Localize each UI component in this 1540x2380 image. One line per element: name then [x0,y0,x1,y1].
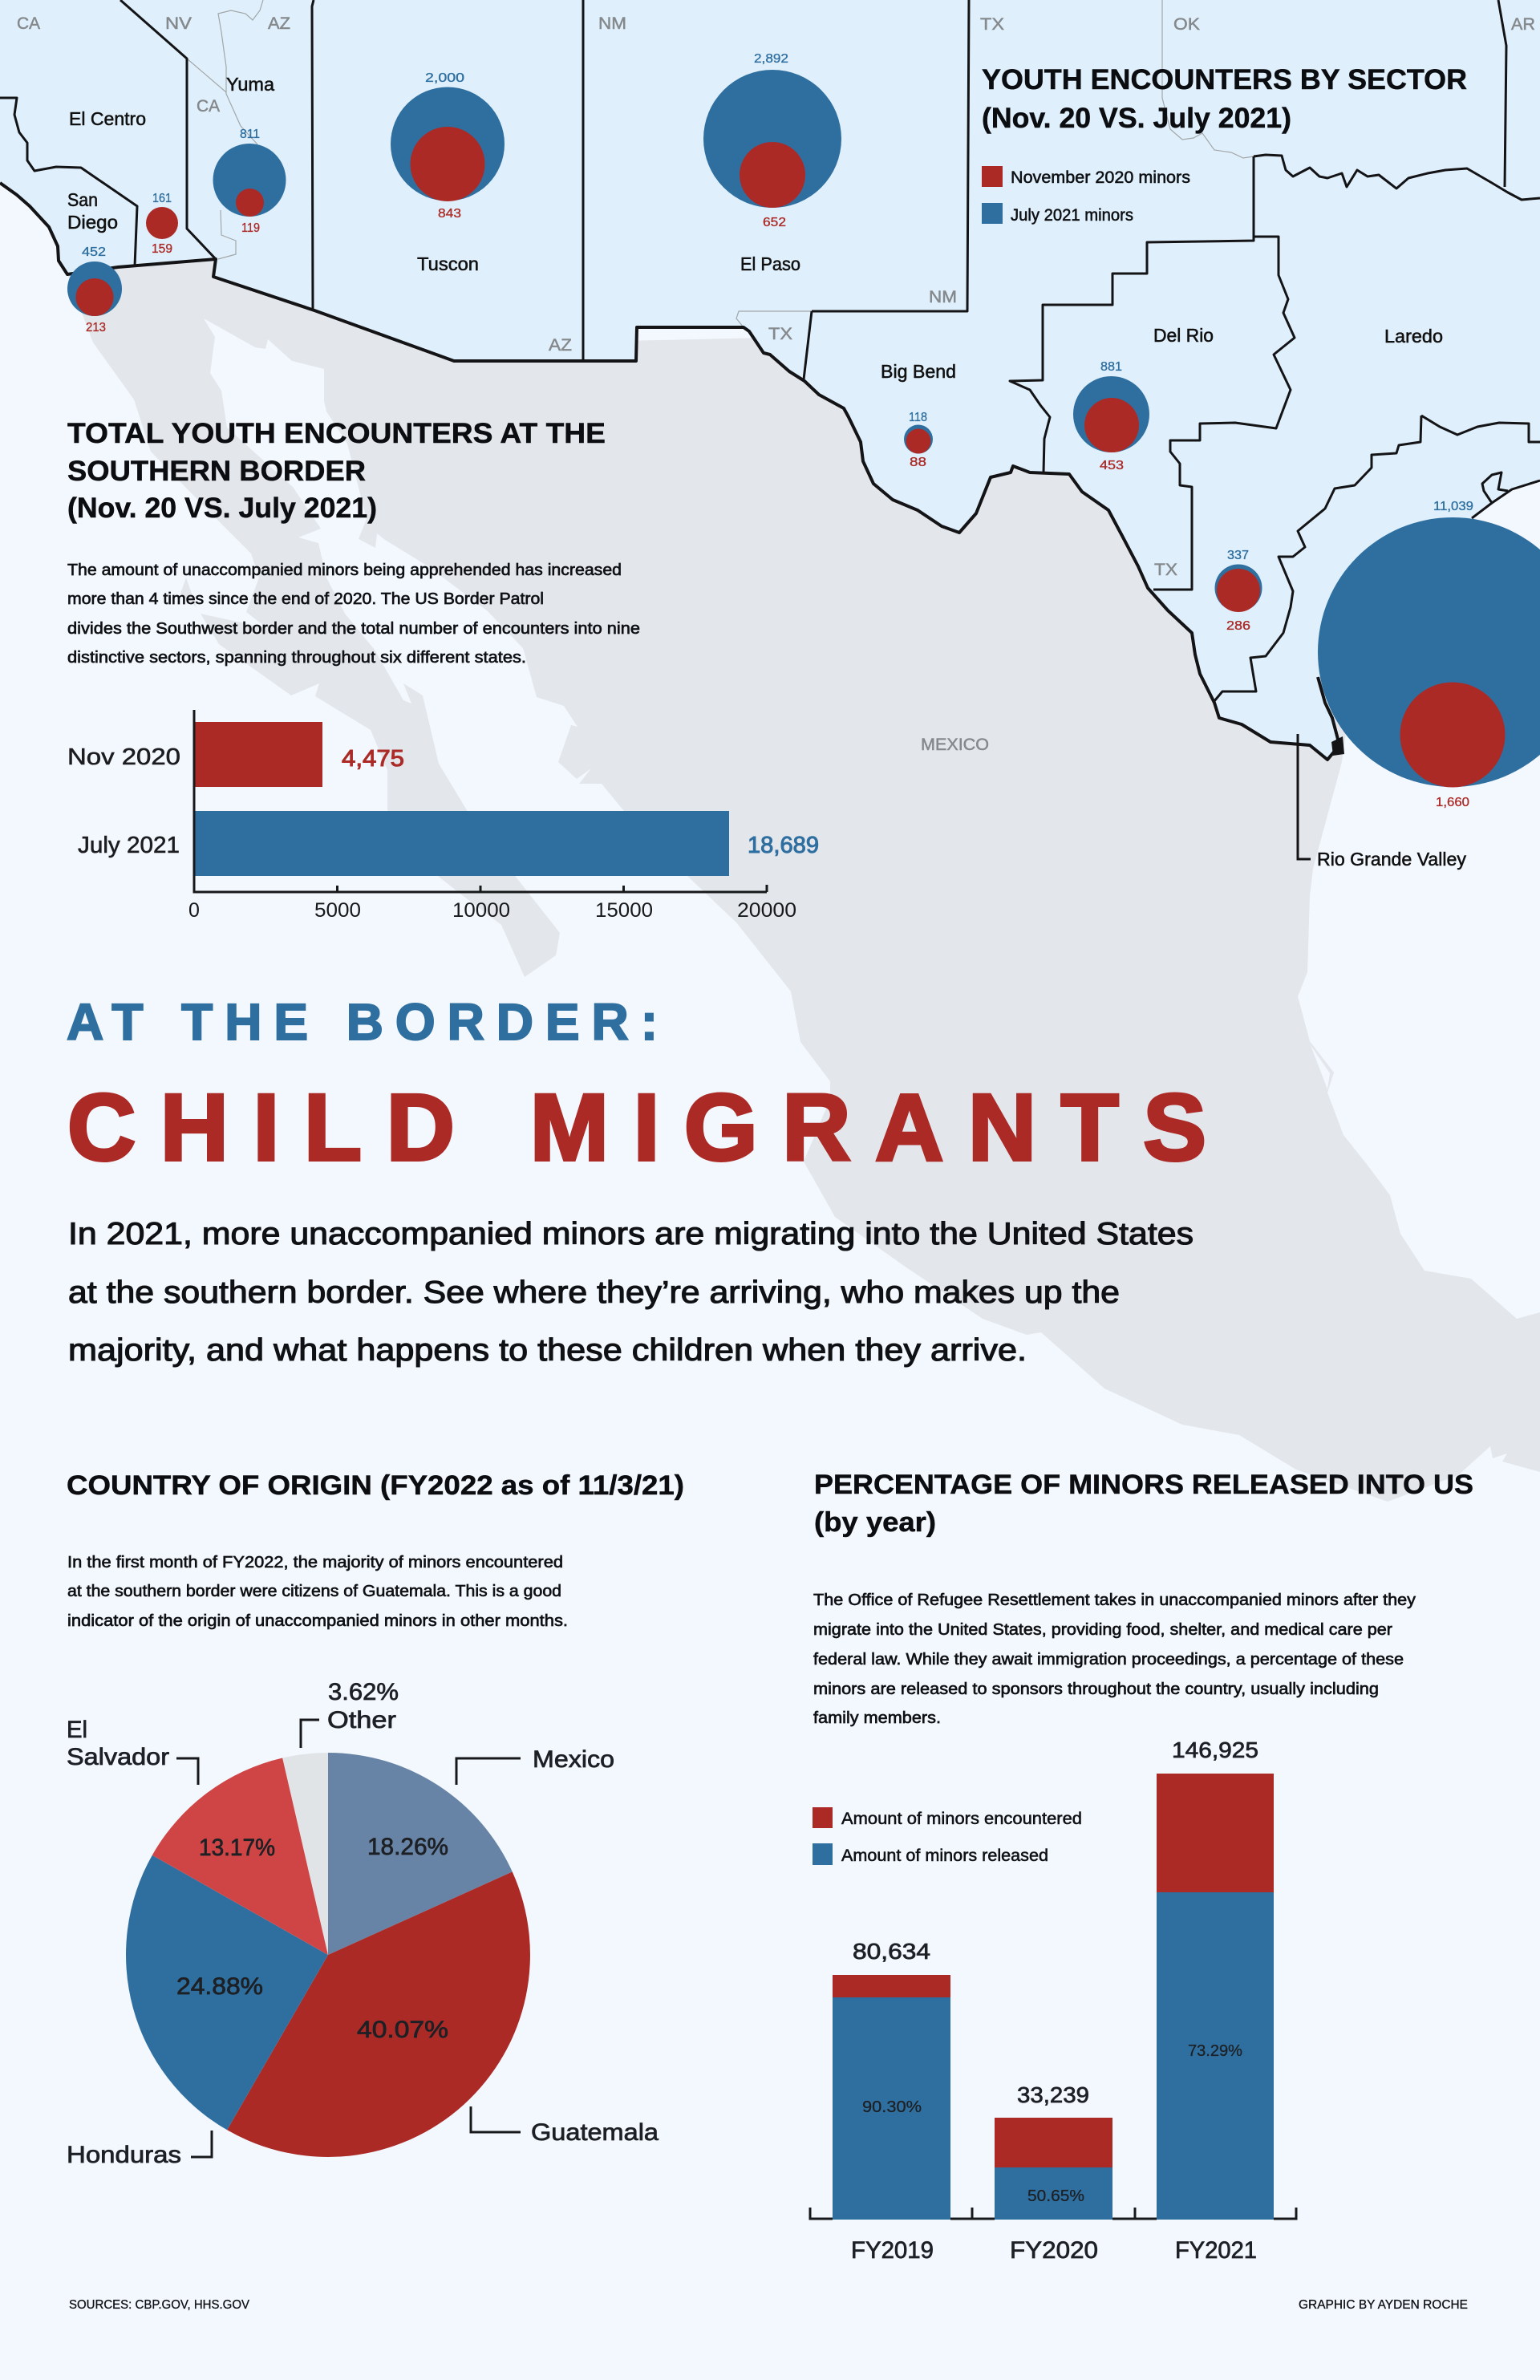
percentage labels: 18.26% [367,1834,448,1860]
sector name labels: San [67,189,98,210]
country labels: Other [327,1707,396,1733]
text block: total encounters description [67,562,640,667]
bubble: Del Rio: 453 [1100,459,1124,472]
bar: FY2019 [833,1939,950,2264]
bubble: Del Rio [1073,360,1149,472]
text block: refugee resettlement description: migrate into the United States, providing food, shelter, and medical care per [813,1621,1392,1639]
bubble: Tuscon [391,71,505,221]
bubble: Laredo: 286 [1226,619,1250,633]
state labels: TX [1154,561,1177,579]
country labels: Salvador [67,1744,169,1770]
text block: total encounters description: more than 4 times since the end of 2020. The US Border Patrol [67,590,544,608]
bar: FY2019: 90.30% [862,2098,922,2116]
sector name labels: Del Rio [1153,325,1214,346]
state labels: CA [197,97,220,116]
title: child migrants: CHILD MIGRANTS [67,1075,1206,1181]
sector name labels: Big Bend [881,361,956,382]
bar: FY2021: 146,925 [1172,1737,1258,1762]
country labels [67,1679,659,2168]
heading: country of origin: COUNTRY OF ORIGIN (FY2022 as of 11/3/21) [67,1470,684,1501]
sector name labels: Diego [67,212,118,233]
bar chart: total encounters: 5000 [314,899,361,922]
state labels: TX [768,325,792,343]
state lines [187,0,1254,327]
bubble: El Paso: 652 [763,216,786,229]
state labels: CA [17,14,40,33]
bar chart: total encounters: 20000 [737,899,796,922]
callout: Rio Grande Valley label [1298,734,1466,870]
callout: Rio Grande Valley label: Rio Grande Valley [1317,849,1466,870]
sector name labels: Yuma [226,74,274,95]
bubble: El Centro: 159 [152,242,172,256]
map of US border sectors [0,0,1540,870]
state labels: AR [1511,15,1535,34]
heading: percentage of minors released: PERCENTAGE OF MINORS RELEASED INTO US [814,1470,1473,1500]
intro paragraph: In 2021, more unaccompanied minors are migrating into the United States [68,1217,1194,1251]
percentage labels: 40.07% [357,2017,448,2043]
bubble: Laredo: 337 [1227,549,1249,562]
state labels: NM [598,14,626,33]
intro paragraph: majority, and what happens to these children when they arrive. [68,1333,1027,1368]
percentage labels [176,1834,448,2043]
state labels: AZ [268,14,290,33]
legend: sector map: November 2020 minors [1011,168,1190,187]
country labels: Guatemala [531,2119,659,2146]
bar: FY2020 [995,2082,1112,2264]
bubble: Yuma: 119 [241,221,260,235]
heading: total youth encounters: SOUTHERN BORDER [67,456,366,487]
bubble: El Centro [146,192,178,256]
heading: youth encounters by sector: YOUTH ENCOUNTERS BY SECTOR [982,64,1467,95]
bubble: El Paso: 2,892 [754,52,788,66]
sector name labels: El Paso [740,253,800,274]
bar: FY2021 [1157,1737,1274,2264]
international border and coastline [0,183,1339,760]
bubble: Yuma [213,128,286,235]
stacked bar chart: minors released [810,1737,1296,2264]
text block: total encounters description: The amount of unaccompanied minors being apprehended has increased [67,562,622,579]
heading: youth encounters by sector [982,64,1467,134]
heading: total youth encounters [67,418,606,524]
state labels: OK [1173,15,1200,34]
bubble: Tuscon: 2,000 [425,71,464,85]
bar chart: total encounters: 18,689 [748,833,819,858]
bubble: Big Bend: 88 [910,456,926,469]
bubble: San Diego [67,245,122,334]
bar chart: total encounters: Nov 2020 [67,744,180,770]
bubble: San Diego: 213 [86,321,106,334]
percentage labels: 13.17% [199,1835,275,1861]
wedge: Other [282,1753,328,1955]
heading: percentage of minors released [814,1470,1473,1538]
US land area [0,0,1540,760]
pie chart: country of origin [67,1679,659,2168]
bubble: Rio Grande Valley: 11,039 [1433,500,1473,513]
leader lines [176,1720,521,2157]
heading: total youth encounters: TOTAL YOUTH ENCOUNTERS AT THE [67,418,606,449]
intro paragraph [68,1217,1194,1368]
country labels: Mexico [533,1746,614,1773]
state labels: AZ [549,336,572,355]
bar chart: total encounters: 15000 [595,899,653,922]
bar chart: total encounters: 0 [188,899,200,922]
state labels: NV [165,14,192,33]
bar: FY2020: 50.65% [1027,2187,1084,2205]
text block: total encounters description: distinctive sectors, spanning throughout six different states. [67,649,526,667]
bar: FY2020: 33,239 [1017,2082,1089,2107]
text block: total encounters description: divides the Southwest border and the total number of encounters into nine [67,620,640,638]
legend: released chart: Amount of minors encountered [841,1810,1082,1828]
sector name labels [67,74,1443,382]
title: at the border: AT THE BORDER: [67,993,658,1051]
wedge: Guatemala [227,1871,530,2157]
bar: FY2020: FY2020 [1010,2237,1098,2264]
bar chart: total encounters [67,710,819,922]
bubble: El Paso [703,52,841,229]
wedge: Honduras [126,1855,328,2130]
map of Mexico background [67,257,1540,1502]
intro paragraph: at the southern border. See where they’re arriving, who makes up the [68,1275,1120,1310]
sources credit: SOURCES: CBP.GOV, HHS.GOV [69,2298,249,2312]
legend: sector map: July 2021 minors [1011,206,1133,225]
bar chart: total encounters: 4,475 [342,746,404,772]
heading: percentage of minors released: (by year) [814,1507,936,1538]
wedge: Mexico [328,1753,513,1955]
country labels: El [67,1717,87,1743]
state labels: MEXICO [921,736,989,754]
sector name labels: El Centro [69,108,146,129]
text block: refugee resettlement description: The Office of Refugee Resettlement takes in unaccompanied minors after they [813,1591,1416,1609]
text block: country of origin description [67,1554,568,1630]
heading: youth encounters by sector: (Nov. 20 VS. July 2021) [982,103,1291,134]
bar chart: total encounters: 10000 [452,899,510,922]
sector boundaries [0,0,1540,701]
bubble: San Diego: 452 [82,245,106,259]
country labels: Honduras [67,2142,181,2168]
state labels: TX [980,15,1004,34]
percentage labels: 24.88% [176,1973,263,2000]
text block: country of origin description: at the southern border were citizens of Guatemala. This is a good [67,1583,561,1600]
text block: country of origin description: In the first month of FY2022, the majority of minors encountered [67,1554,563,1571]
bubble: Laredo [1214,549,1262,633]
bar: FY2019: 80,634 [853,1939,930,1964]
bubble: Big Bend [904,411,933,469]
bar chart: total encounters: July 2021 [78,833,180,858]
legend: sector map [982,166,1190,225]
country labels: 3.62% [328,1679,399,1705]
state labels: NM [929,288,957,306]
bar: FY2019: FY2019 [851,2237,934,2264]
text block: refugee resettlement description: minors are released to sponsors throughout the country, usually including [813,1681,1379,1698]
axis [810,2208,1296,2219]
sector name labels: Tuscon [417,253,479,274]
bar: FY2021: 73.29% [1188,2042,1242,2060]
bubble: Big Bend: 118 [909,411,927,424]
bubble: Del Rio: 881 [1100,360,1122,374]
wedge: El Salvador [152,1758,328,1955]
bubble: Rio Grande Valley [1318,500,1540,809]
bar: FY2021: FY2021 [1175,2237,1257,2264]
bubble: Rio Grande Valley: 1,660 [1436,796,1469,809]
text block: refugee resettlement description [813,1591,1416,1727]
heading: total youth encounters: (Nov. 20 VS. July 2021) [67,493,377,524]
legend: released chart: Amount of minors released [841,1847,1048,1865]
bubble: El Centro: 161 [152,192,172,205]
legend: released chart [813,1807,1082,1865]
bubble: Tuscon: 843 [438,207,461,221]
bubble: Yuma: 811 [240,128,260,141]
text block: refugee resettlement description: federal law. While they await immigration proceedings, a percentage of these [813,1651,1404,1668]
state labels [17,14,1535,754]
sector name labels: Laredo [1384,326,1443,347]
text block: country of origin description: indicator of the origin of unaccompanied minors in other months. [67,1612,568,1630]
text block: refugee resettlement description: family members. [813,1709,941,1727]
graphic credit: GRAPHIC BY AYDEN ROCHE [1299,2298,1468,2312]
